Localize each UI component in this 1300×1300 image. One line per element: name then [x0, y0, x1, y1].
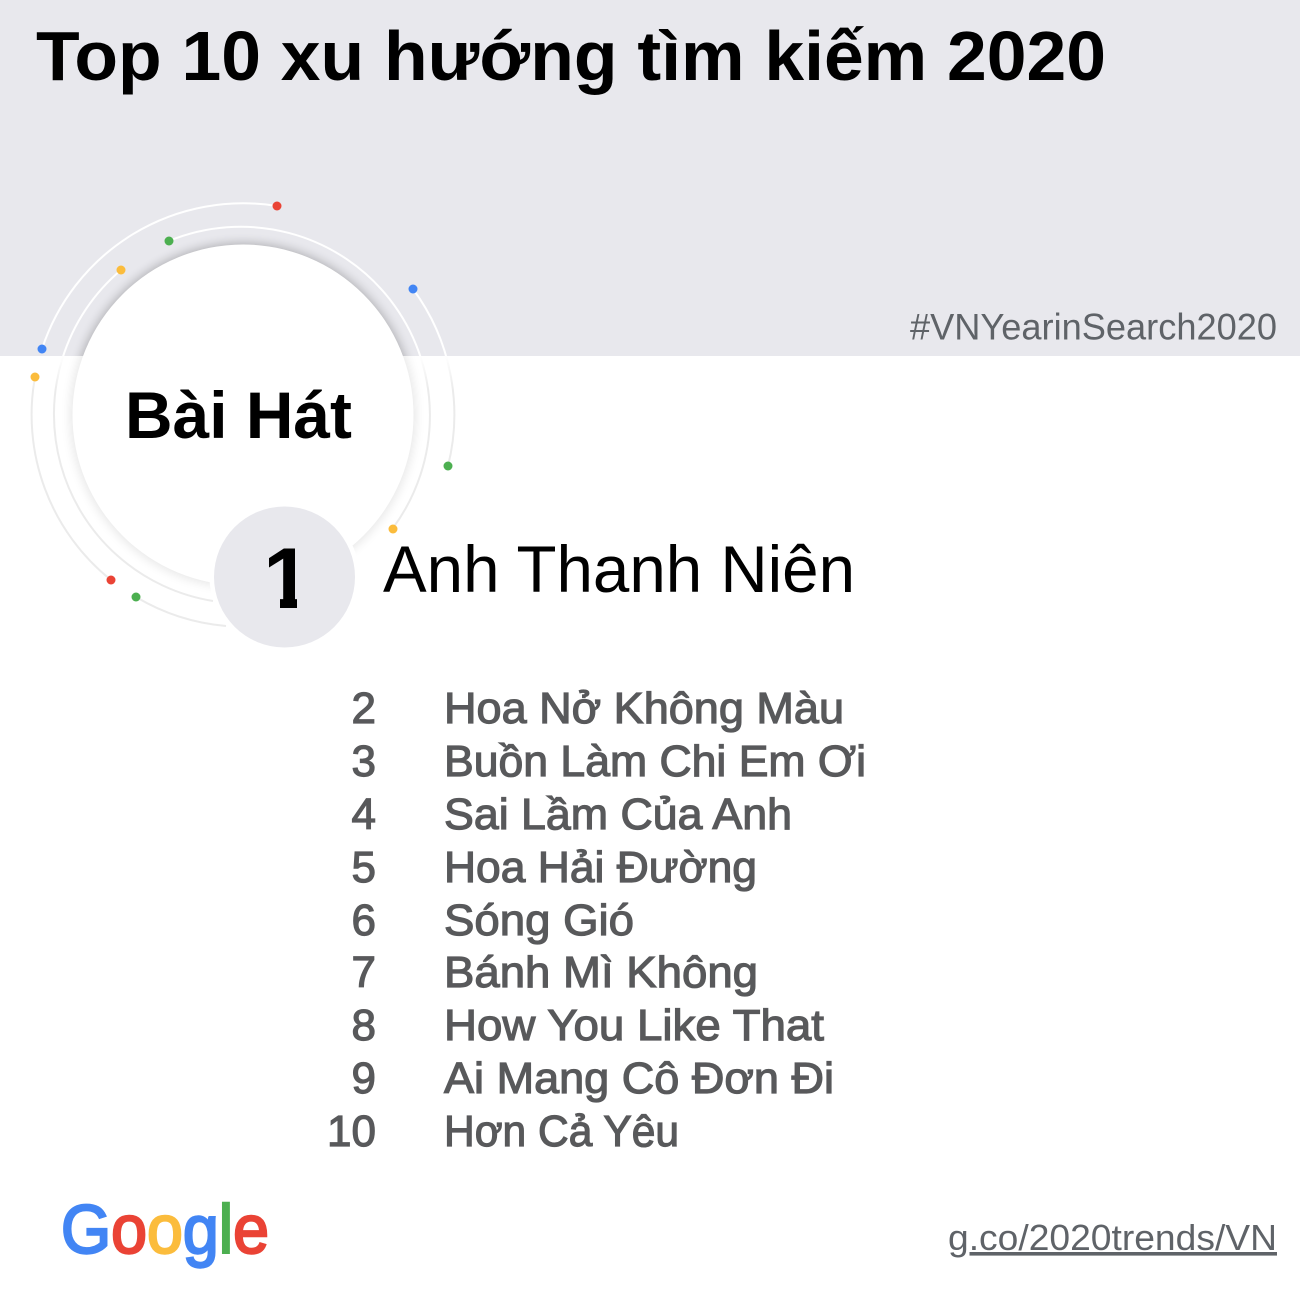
- ranked list 2 to 10: Hoa Nở Không Màu: [444, 684, 844, 733]
- Google logo: Google: [61, 1191, 269, 1268]
- ranked list 2 to 10: 7: [352, 948, 376, 997]
- ranked list 2 to 10: 4: [352, 790, 376, 839]
- ranked list 2 to 10: Buồn Làm Chi Em Ơi: [444, 737, 866, 786]
- title: Top 10 xu hướng tìm kiếm 2020: [36, 17, 1106, 95]
- coloured dots: [30, 202, 452, 602]
- ranked list 2 to 10: Ai Mang Cô Đơn Đi: [444, 1054, 834, 1103]
- ranked list 2 to 10: 3: [352, 737, 376, 786]
- source link: g.co/2020trends/VN: [948, 1217, 1277, 1258]
- rank 1 song title: Anh Thanh Niên: [383, 532, 855, 606]
- hashtag: #VNYearinSearch2020: [910, 306, 1277, 348]
- header band: [0, 0, 1300, 356]
- rank 1 badge: 1: [263, 531, 311, 627]
- ranked list 2 to 10: Sóng Gió: [444, 896, 634, 945]
- ranked list 2 to 10: 2: [352, 684, 376, 733]
- ranked list 2 to 10: 10: [327, 1107, 376, 1156]
- ranked list 2 to 10: 8: [352, 1001, 376, 1050]
- ranked list 2 to 10: 5: [352, 843, 376, 892]
- rank 1 badge: [210, 502, 360, 652]
- ranked list 2 to 10: 6: [352, 896, 376, 945]
- ranked list 2 to 10: Hơn Cả Yêu: [444, 1107, 679, 1156]
- white circle: [72, 244, 414, 586]
- ring arcs: [32, 203, 454, 626]
- circle shadow: [70, 242, 416, 588]
- category badge: rings, dots and title: [30, 202, 454, 626]
- category title: Bài Hát: [125, 378, 352, 452]
- ranked list 2 to 10: Hoa Hải Đường: [444, 843, 757, 892]
- ranked list 2 to 10: 9: [352, 1054, 376, 1103]
- ranked list 2 to 10: How You Like That: [444, 1001, 824, 1050]
- ranked list 2 to 10: Sai Lầm Của Anh: [444, 790, 792, 839]
- ranked list 2 to 10: Bánh Mì Không: [444, 948, 758, 997]
- ranked list 2 to 10: [327, 684, 866, 1156]
